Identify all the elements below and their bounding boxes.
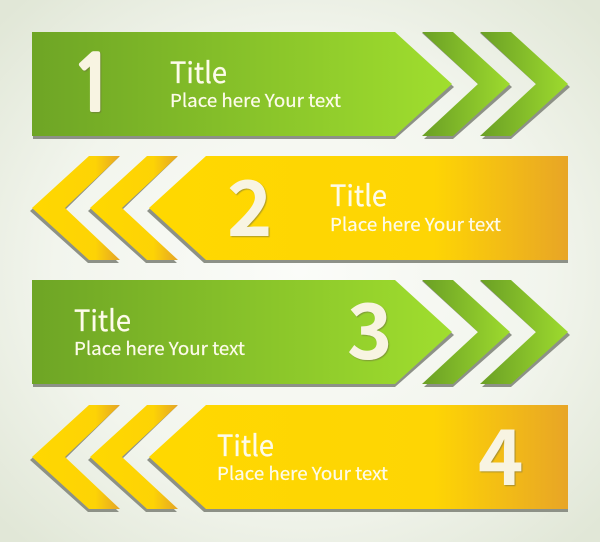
title 4: Title [217, 423, 274, 465]
body text 2: Place here Your text [330, 211, 501, 237]
number 1: 1 [70, 47, 117, 123]
title 1: Title [170, 50, 227, 92]
banner 4: yellow [30, 397, 568, 512]
title 2: Title [330, 173, 387, 215]
chevron 4a [30, 405, 120, 512]
chevron 2b [88, 156, 178, 263]
chevron 1b [480, 32, 570, 139]
arrow body 4 [147, 405, 568, 512]
banner 3: green [32, 271, 570, 387]
chevron 4b [88, 405, 178, 512]
arrow body 1 [32, 32, 454, 139]
body text 3: Place here Your text [74, 335, 245, 361]
number 4: 4 [478, 397, 523, 508]
chevron 1a [422, 32, 512, 139]
title 3: Title [74, 298, 131, 340]
chevron 3b [480, 280, 570, 387]
banner 1: green [32, 32, 570, 139]
number 3: 3 [347, 271, 392, 382]
chevron 2a [30, 156, 120, 263]
body text 4: Place here Your text [217, 460, 388, 486]
number 2: 2 [227, 148, 272, 259]
arrow body 2 [147, 156, 568, 263]
body text 1: Place here Your text [170, 87, 341, 113]
arrow body 3 [32, 280, 454, 387]
chevron 3a [422, 280, 512, 387]
banner 2: yellow [30, 148, 568, 263]
